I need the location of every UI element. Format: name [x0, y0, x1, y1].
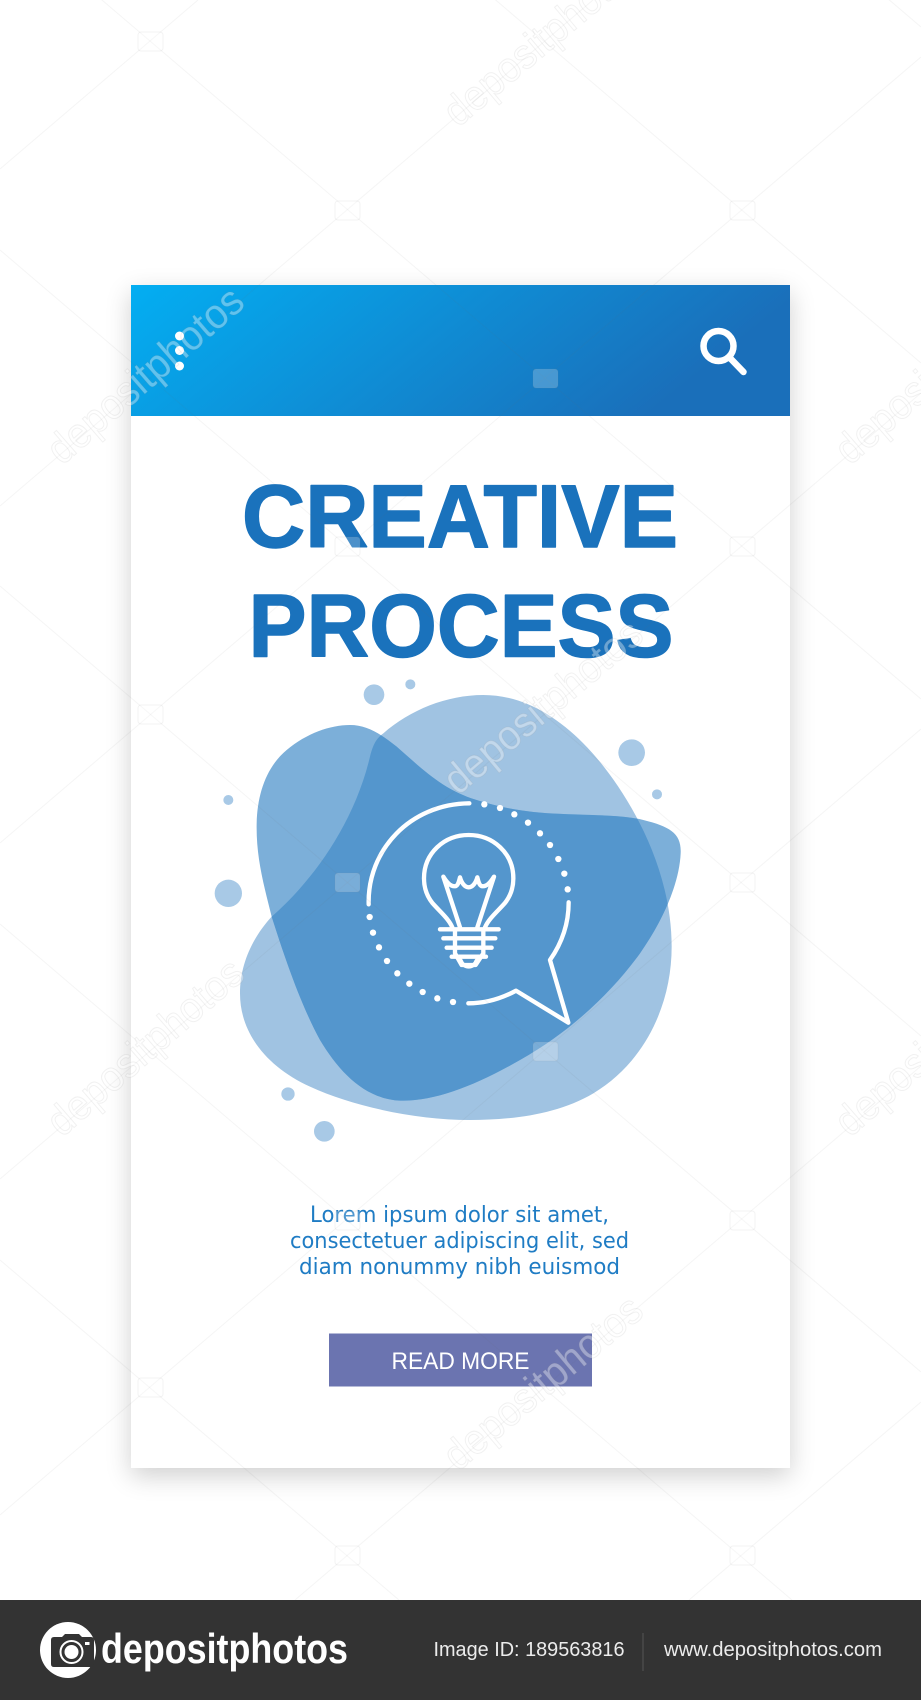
logo wordmark: depositphotos	[101, 1625, 348, 1672]
panel: phone card	[131, 285, 790, 1468]
icon: light bulb	[424, 835, 513, 966]
button: read more	[329, 1334, 592, 1386]
icon: menu dots	[175, 332, 184, 370]
front blob	[257, 725, 681, 1101]
speech bubble outline	[369, 803, 569, 1023]
body text: Lorem ipsum dolor sit amet,	[310, 1203, 609, 1228]
title	[242, 466, 678, 676]
speech bubble dots	[366, 801, 571, 1005]
header bar	[131, 285, 790, 416]
illustration: blobs and light bulb	[215, 679, 681, 1142]
title: PROCESS	[248, 576, 674, 676]
watermark logos: depositphotos	[37, 277, 253, 473]
icon: camera logo	[40, 1622, 96, 1678]
watermark logos: depositphotos	[434, 1285, 651, 1479]
watermark logos: depositphotos	[434, 609, 651, 803]
watermark logos: depositphotos	[37, 949, 253, 1145]
watermark camera marks	[138, 32, 755, 1565]
body text	[290, 1203, 629, 1280]
website url: www.depositphotos.com	[663, 1638, 882, 1661]
icon: search	[704, 331, 744, 372]
button: read more: READ MORE	[392, 1348, 530, 1375]
blob overlap	[257, 725, 681, 1101]
decorative bubbles	[215, 679, 662, 1142]
body text: diam nonummy nibh euismod	[299, 1255, 620, 1280]
footer bar	[0, 1600, 921, 1700]
body text: consectetuer adipiscing elit, sed	[290, 1229, 629, 1254]
title: CREATIVE	[242, 466, 678, 566]
image id: Image ID: 189563816	[434, 1638, 624, 1661]
back blob	[240, 695, 672, 1120]
